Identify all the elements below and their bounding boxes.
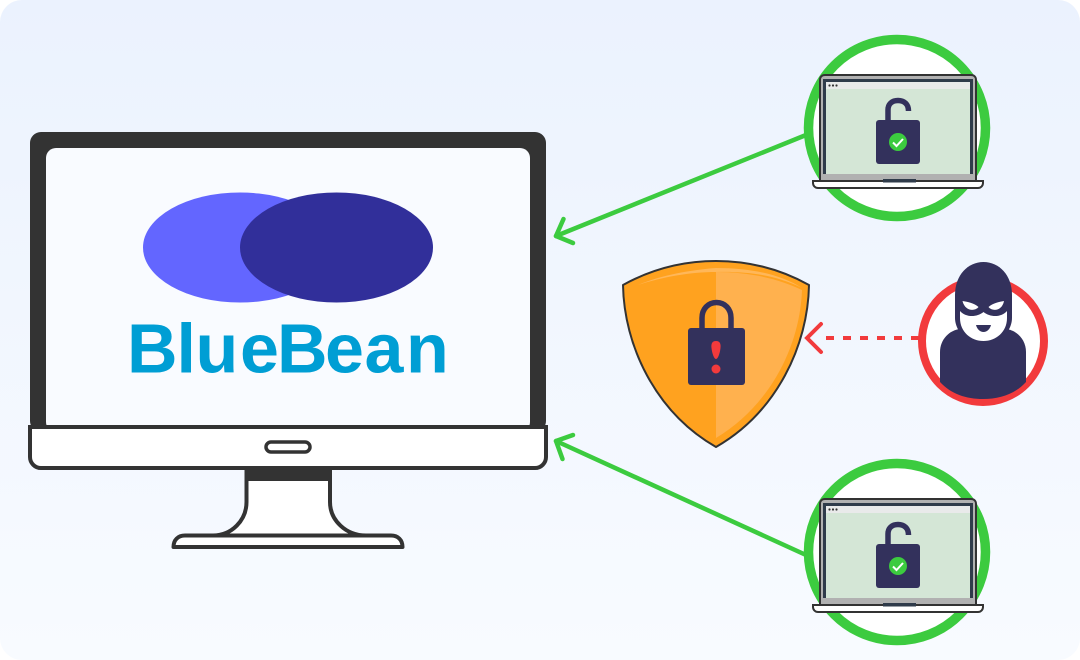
- hooded figure: [940, 262, 1026, 399]
- top laptop badge: [808, 40, 986, 216]
- arrow: top laptop to monitor: [556, 135, 806, 243]
- monitor: [30, 132, 546, 547]
- monitor bezel: [30, 132, 546, 432]
- arrow: attacker blocked by shield: [807, 324, 919, 352]
- BlueBean logo: [127, 192, 449, 388]
- bottom laptop badge: [808, 464, 986, 640]
- green ring: [808, 464, 986, 640]
- green ring: [808, 40, 986, 216]
- laptop: [813, 499, 983, 612]
- red ring: [922, 280, 1044, 402]
- monitor screen: [46, 148, 530, 432]
- logo mark: [143, 192, 433, 302]
- open padlock with check: [876, 100, 920, 164]
- monitor stand: [174, 467, 402, 547]
- monitor button: [266, 442, 310, 452]
- attacker badge: [922, 262, 1044, 402]
- alert mark: [711, 341, 721, 374]
- monitor chin: [30, 427, 546, 468]
- logo wordmark: BlueBean: [127, 310, 449, 388]
- arrow: bottom laptop to monitor: [556, 435, 806, 555]
- laptop: [813, 75, 983, 188]
- shield: [623, 261, 809, 447]
- open padlock with check: [876, 524, 920, 588]
- shield padlock: [688, 302, 745, 385]
